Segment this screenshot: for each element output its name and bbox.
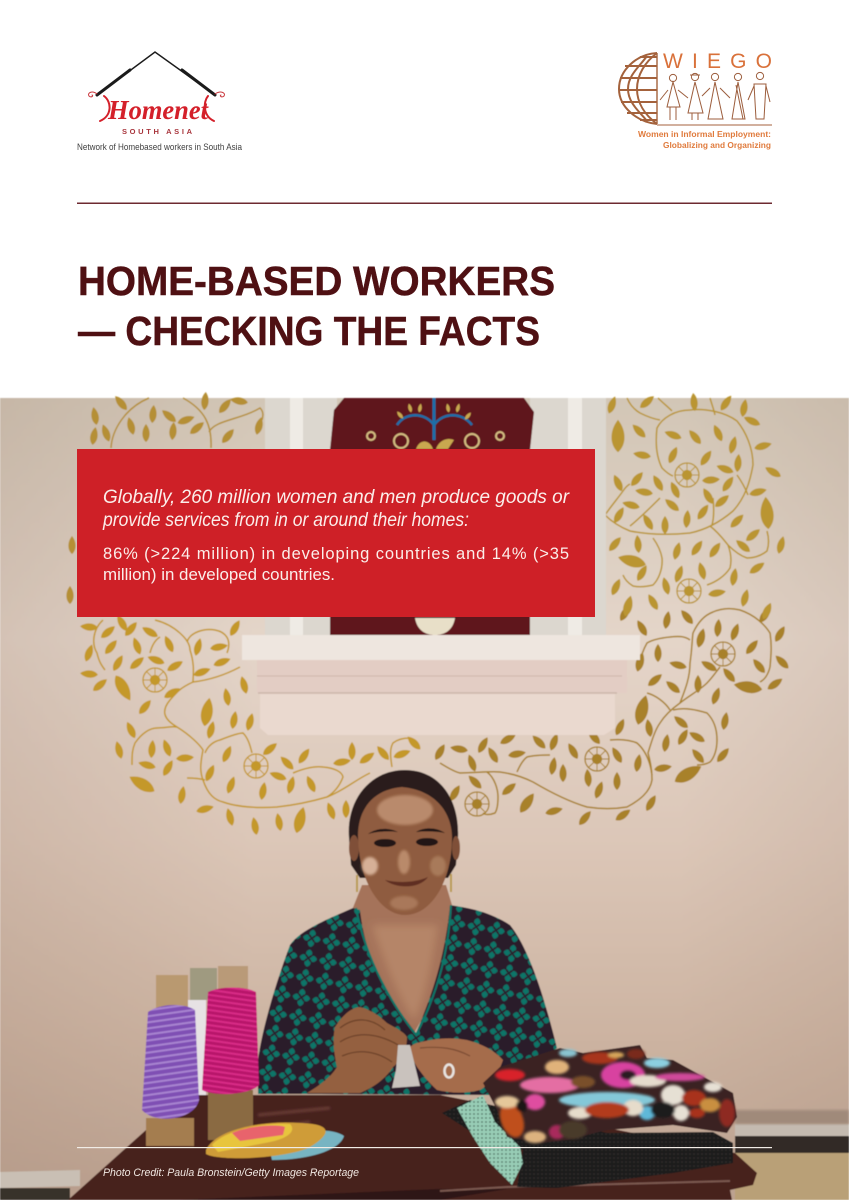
window frames <box>265 398 337 636</box>
logo: Homenet South Asia <box>77 52 243 153</box>
collar trim <box>356 905 451 1035</box>
purple spool <box>156 975 188 1008</box>
lead statement: Globally, 260 million women and men produce goods or <box>103 486 570 508</box>
painted gold vine wreath <box>66 392 791 835</box>
tagline <box>638 129 771 150</box>
divider <box>77 202 772 204</box>
ears <box>349 835 359 861</box>
mouth <box>385 877 428 886</box>
vines: lower left <box>94 620 410 807</box>
dress <box>258 905 557 1095</box>
WIEGO wordmark: WIEGO <box>663 50 772 73</box>
pink spool <box>218 966 248 990</box>
baseline rule <box>657 124 772 126</box>
floor and ledge <box>0 1110 849 1200</box>
vines: lower right <box>440 609 771 814</box>
vines: upper right <box>605 398 768 587</box>
lead statement: provide services from in or around their homes: <box>102 509 469 531</box>
table <box>68 1095 757 1200</box>
SOUTH ASIA: SOUTH ASIA <box>122 127 193 136</box>
title <box>78 258 555 354</box>
icon: globe <box>619 53 657 124</box>
panel motif <box>367 398 504 449</box>
tagline: Women in Informal Employment: <box>638 129 771 139</box>
tagline: Globalizing and Organizing <box>663 140 771 150</box>
breakdown statement <box>103 545 569 584</box>
title: HOME-BASED WORKERS <box>78 258 555 304</box>
tagline: Network of Homebased workers in South Asia <box>77 142 243 153</box>
small crochet coaster <box>206 1122 344 1160</box>
wall <box>0 398 849 1200</box>
face <box>358 787 452 915</box>
footer rule <box>77 1147 772 1148</box>
red callout box <box>77 449 595 617</box>
vines: top left <box>111 398 263 448</box>
woman <box>258 770 557 1095</box>
pot <box>415 618 455 635</box>
hair <box>349 770 458 878</box>
forehead and cheek highlights <box>362 795 446 910</box>
crochet work in hand <box>392 1045 420 1088</box>
lead statement <box>102 486 570 531</box>
colourful granny squares <box>483 1045 737 1143</box>
black crochet <box>442 1100 733 1188</box>
breakdown statement: 86% (>224 million) in developing countries and 14% (>35 <box>103 545 569 563</box>
breakdown statement: million) in developed countries. <box>103 566 335 584</box>
icon: roof of two needles <box>89 52 224 121</box>
sill <box>242 635 640 660</box>
thread spools <box>142 966 259 1146</box>
photo credit: Photo Credit: Paula Bronstein/Getty Images Reportage <box>103 1167 359 1179</box>
crochet pile <box>442 1045 737 1188</box>
right hand <box>407 1038 503 1093</box>
white spool <box>190 968 217 1000</box>
photo: home-based worker crocheting <box>0 392 849 1200</box>
painted panel <box>330 398 534 636</box>
mint crochet <box>457 1095 523 1185</box>
eyes and brows <box>368 828 445 847</box>
neck and chest <box>352 885 452 1033</box>
window with painted panel <box>242 398 640 735</box>
wordmark: Homenet <box>107 95 209 125</box>
left hand and forearm <box>307 1007 407 1093</box>
earrings <box>357 874 451 892</box>
title: — CHECKING THE FACTS <box>78 308 540 354</box>
logo: WIEGO <box>619 50 772 150</box>
icon: five women holding hands <box>660 72 770 120</box>
